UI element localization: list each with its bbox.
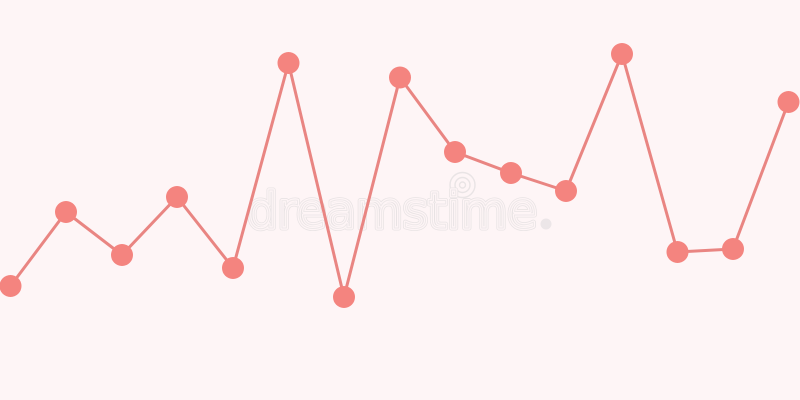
data line xyxy=(10,54,788,297)
watermark: dreamstime xyxy=(247,182,537,240)
watermark: dreamstime xyxy=(247,182,537,240)
data points xyxy=(0,43,800,308)
watermark: dreamstime xyxy=(247,182,537,240)
